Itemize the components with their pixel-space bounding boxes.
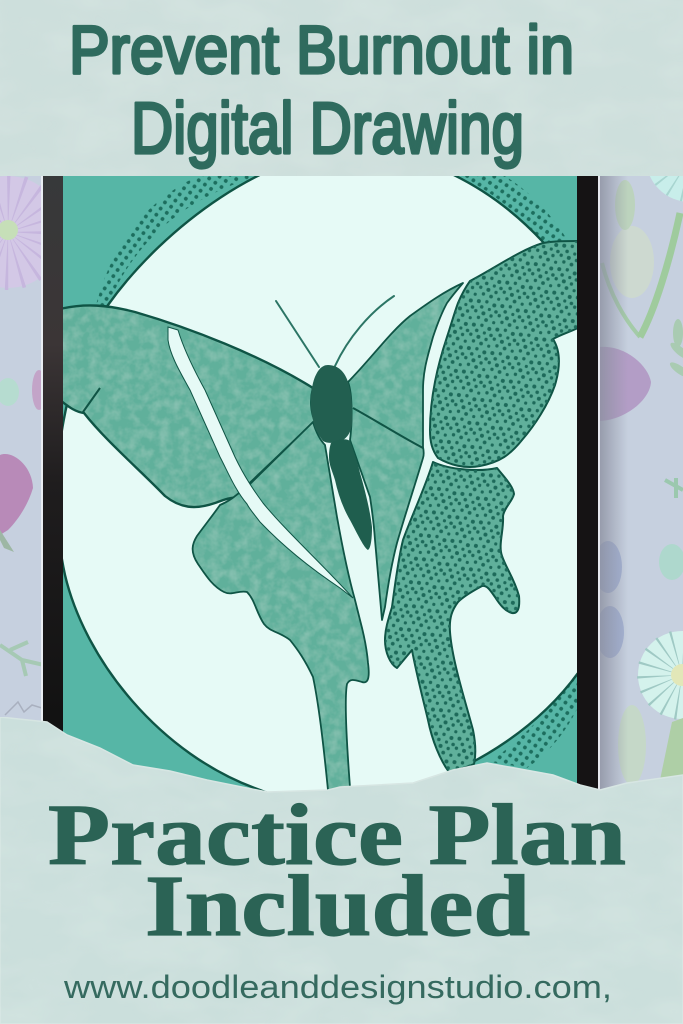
icon: fern leaf — [670, 319, 683, 376]
heading line 2: Included — [145, 857, 530, 954]
left forewing — [60, 305, 315, 508]
title — [69, 12, 574, 169]
icon: purple daisy — [0, 176, 41, 290]
phone screen illustration — [63, 176, 577, 792]
butterfly — [60, 241, 580, 800]
torn paper panel — [0, 717, 683, 1024]
right forewing dotted — [430, 241, 580, 467]
background floral pattern: left strip — [0, 176, 41, 716]
icon: lower stalk — [618, 705, 683, 785]
icon: purple flower — [600, 347, 651, 421]
body thorax — [311, 365, 352, 443]
title line 2: Digital Drawing — [131, 89, 524, 169]
phone frame — [41, 176, 600, 796]
left wing pale stripe — [168, 327, 353, 598]
title line 1: Prevent Burnout in — [69, 12, 574, 88]
shadow beside phone — [600, 176, 628, 796]
heading line 1: Practice Plan — [48, 786, 626, 883]
website url: www.doodleanddesignstudio.com, — [63, 969, 612, 1005]
right phone bar — [577, 176, 598, 796]
icon: blue flowers — [601, 541, 624, 658]
icon: small green sprig — [665, 478, 683, 498]
halftone dots around circle — [96, 170, 578, 768]
icon: pale leaf and purple bud — [0, 370, 41, 410]
icon: teal daisy — [638, 631, 683, 719]
teal background — [63, 176, 577, 796]
left hindwing — [193, 422, 369, 800]
background floral pattern: right strip — [600, 176, 683, 782]
antennae — [276, 296, 394, 367]
pale circle — [63, 176, 577, 792]
icon: pale flower stalk — [602, 180, 680, 337]
heading: practice plan included — [48, 786, 626, 954]
left forewing notch — [83, 388, 100, 412]
icon: teal sprig — [659, 544, 683, 580]
left phone bar — [43, 176, 64, 736]
icon: magenta flower — [0, 454, 33, 552]
icon: faint scribble — [5, 702, 42, 715]
right plain wing — [348, 283, 463, 620]
icon: green sprig — [0, 642, 44, 676]
icon: teal flower top right — [650, 176, 683, 202]
right hindwing dotted — [385, 462, 519, 772]
body abdomen — [329, 439, 372, 550]
right wing vein — [353, 408, 423, 448]
top paper band — [0, 0, 683, 176]
